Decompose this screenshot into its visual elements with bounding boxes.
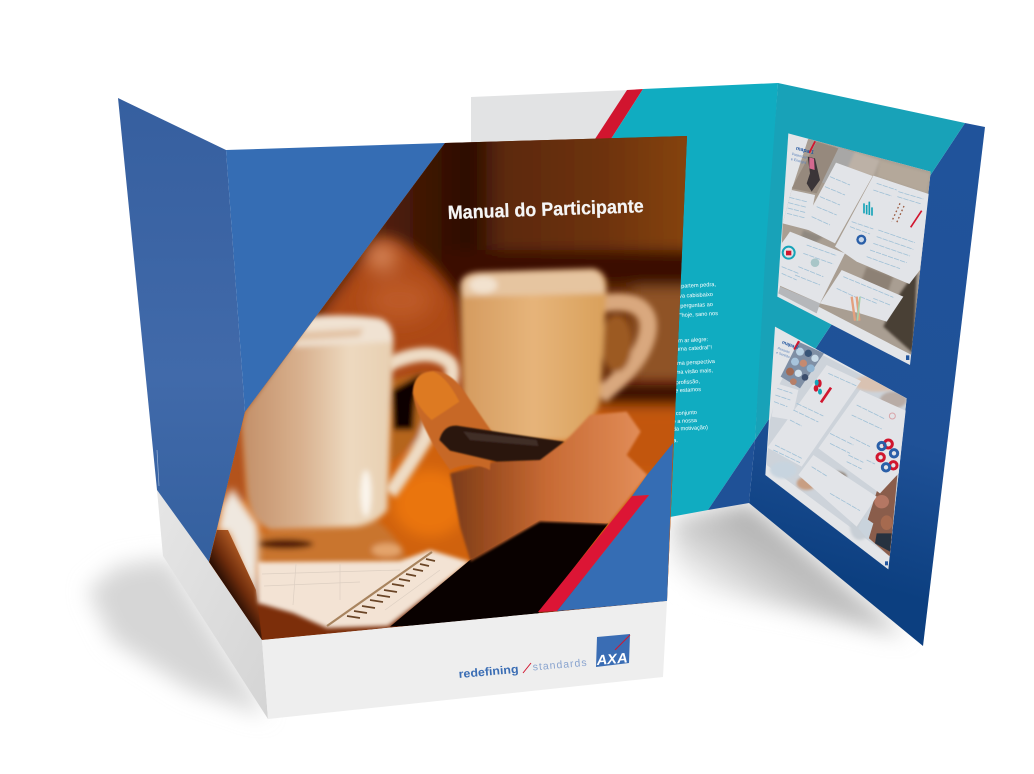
red diagonal mark [793, 341, 800, 350]
teal centre panel [611, 83, 778, 517]
blue logo mark [885, 561, 888, 565]
saucer and mug shadow [250, 520, 407, 563]
heading: mapa 1: Potencial [791, 152, 807, 160]
dark sleeve [390, 520, 608, 627]
back mug [460, 268, 648, 442]
body text on teal panel: al e a nossa [667, 418, 698, 426]
body text on teal panel: rei perguntas ao [672, 302, 713, 310]
front mug body [242, 315, 393, 530]
cards with text lines [778, 163, 929, 322]
left orange strip beside mug [224, 425, 246, 502]
cover photo: coffee mugs and hand with pen [209, 136, 687, 640]
hand palm [450, 412, 647, 562]
climber photo [792, 142, 838, 193]
teal right panel [755, 83, 965, 440]
blue logo mark [906, 355, 909, 360]
heading: mapa 2: e Sentido [776, 351, 790, 359]
heading: mapa 2 [776, 340, 799, 359]
left blue panel [118, 98, 245, 562]
pen [439, 426, 564, 462]
crowd group [781, 342, 824, 388]
table surface [197, 385, 717, 580]
cover title: Manual do Participante [447, 196, 644, 224]
blue triangle: cover top left [226, 143, 445, 412]
red stripe: cover [538, 495, 649, 612]
hand shadow at lower left [262, 632, 344, 640]
bottom white pocket flap [262, 601, 667, 719]
photo base colour [200, 130, 700, 650]
notebook page [257, 550, 470, 628]
body text on teal panel: estava cabisbaixo [668, 292, 713, 300]
body text on teal panel: o com ar alegre: [667, 337, 709, 345]
body text on teal panel: o numa perspectiva [666, 359, 716, 368]
rock photo background [780, 138, 931, 355]
swimmer photo [868, 475, 898, 556]
crowd photo background [767, 343, 907, 557]
heading: mapa 1: e Energia [790, 157, 808, 165]
body text on teal panel: os conjunto [668, 410, 697, 417]
red and teal flower diagram [814, 379, 831, 402]
mini charts [783, 202, 922, 321]
heading: mapa 1 [790, 146, 814, 165]
blue corner: cover bottom right [557, 443, 673, 611]
front mug handle [387, 355, 452, 493]
body text on teal panel: a. [673, 438, 679, 444]
floor shadow: back folder [672, 503, 905, 636]
thin label on left panel [157, 450, 159, 486]
insert sheet: mapa 2 [765, 327, 907, 569]
AXA logo: AXA [595, 649, 628, 668]
body text on teal panel: ce (da motivação) [663, 425, 708, 433]
body text on teal panel: sa profissão, [668, 379, 701, 387]
grey inner panel [471, 90, 630, 145]
red stripe: back panel [595, 89, 643, 139]
book edge at lower left [209, 488, 262, 640]
front folder [118, 98, 717, 719]
tagline: redefining standards: standards [532, 657, 587, 673]
thumb [413, 371, 492, 470]
heading: mapa 1: mapa 1 [795, 146, 814, 156]
body text on teal panel [663, 282, 718, 444]
cards with text lines [767, 365, 906, 527]
tagline: redefining standards: redefining [458, 664, 519, 681]
body text on teal panel: numa visão mais, [669, 368, 714, 376]
blue right panel [749, 123, 985, 646]
body text on teal panel: que estamos [669, 387, 701, 395]
back folder: inside spread [471, 83, 985, 646]
insert sheet: mapa 1 [777, 133, 931, 365]
body text on teal panel: que partem pedra, [670, 282, 717, 290]
heading: mapa 2: mapa 2 [781, 340, 799, 351]
left side flap [157, 490, 268, 719]
body text on teal panel: disse: "hoje, sano nos [663, 311, 718, 320]
tagline: redefining standards [458, 657, 587, 681]
background wall [260, 136, 687, 391]
heading: mapa 2: Pessoas [777, 346, 791, 354]
red and blue circle diagram [877, 413, 898, 471]
AXA logo [595, 634, 630, 668]
blue centre triangle [708, 440, 755, 510]
red diagonal mark [808, 141, 816, 153]
body text on teal panel: ruir uma catedral"! [666, 345, 713, 353]
floor shadow: front folder [88, 558, 266, 716]
